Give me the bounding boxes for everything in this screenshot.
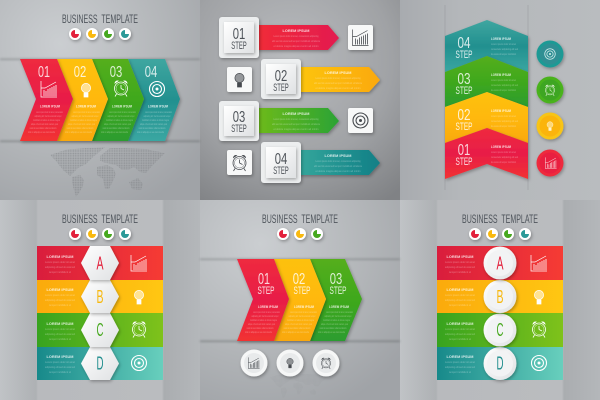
- chevron 03 green: [310, 259, 362, 341]
- circle C: C: [496, 320, 504, 340]
- icon circle: chart: [240, 350, 268, 376]
- arrow 03 green: LOREM IPSUM: [282, 112, 310, 116]
- panel: background 1: [0, 0, 200, 200]
- row B: LOREM IPSUM: [446, 288, 474, 292]
- icon box: target: [348, 108, 373, 133]
- chevron 04 teal: [445, 20, 528, 72]
- panel: four steps with arrows: [219, 17, 380, 183]
- step box 03: 03: [233, 109, 245, 126]
- arrow 02 yellow: LOREM IPSUM: [324, 71, 352, 75]
- hexagon D: [81, 347, 119, 380]
- chevron 01 red: 01: [38, 64, 50, 81]
- chevron 04 teal: 04: [458, 35, 471, 52]
- icon circle: bulb: [536, 112, 564, 140]
- circle D: [484, 347, 516, 380]
- icon box: bulb: [227, 67, 252, 92]
- row C: [437, 313, 563, 347]
- step box 02: 02: [275, 68, 287, 85]
- chevron 01 red: [20, 59, 73, 141]
- arrow 04 teal: [297, 150, 380, 175]
- chevron 03 green: 03: [110, 64, 122, 81]
- circle D: D: [496, 354, 504, 374]
- step box 04: [261, 142, 301, 183]
- chevron 02 yellow: [57, 59, 108, 141]
- chevron 04 teal: STEP: [456, 49, 472, 61]
- hexagon D: D: [96, 354, 104, 374]
- hexagon C: [81, 313, 119, 347]
- legend dots: [277, 228, 323, 240]
- step box 01: STEP: [231, 40, 247, 52]
- chevron 01 red: STEP: [456, 156, 472, 168]
- arrow 04 teal: LOREM IPSUM: [324, 154, 352, 158]
- row D: [437, 347, 563, 380]
- chevron 03 green: STEP: [456, 85, 472, 97]
- circle B: B: [496, 287, 504, 307]
- chevron 03 green: LOREM IPSUM: [491, 73, 511, 77]
- panel: background 2: [200, 0, 400, 200]
- hexagon C: C: [96, 320, 104, 340]
- chevron 01 red: [445, 128, 528, 179]
- icon box: chart: [348, 25, 373, 50]
- icon circle: target: [536, 40, 564, 68]
- panel: hexagon list A-D: [37, 214, 163, 380]
- chevron 02 yellow: LOREM IPSUM: [491, 109, 511, 113]
- chevron 01 red: LOREM IPSUM: [40, 104, 60, 108]
- icon: world map: [50, 147, 165, 197]
- chevron 03 green: STEP: [330, 285, 346, 297]
- chevron 01 red: 01: [258, 271, 270, 288]
- chevron 02 yellow: LOREM IPSUM: [76, 104, 96, 108]
- step box 02: [261, 59, 301, 99]
- panel: circle list A-D: [437, 214, 563, 380]
- arrow 02 yellow: [297, 67, 380, 92]
- panel: vertical stacked chevrons: [444, 5, 564, 190]
- row A: [37, 246, 163, 280]
- icon circle: chart: [536, 150, 564, 176]
- panel: background 5: [200, 200, 400, 400]
- legend dots: [69, 228, 131, 240]
- step box 03: STEP: [231, 123, 247, 135]
- chevron 01 red: [237, 259, 289, 341]
- circle A: A: [496, 254, 504, 274]
- chevron 01 red: STEP: [258, 285, 274, 297]
- icon circle: bulb: [276, 350, 304, 376]
- row B: [437, 280, 563, 313]
- hexagon B: [81, 280, 119, 313]
- chevron 02 yellow: 02: [458, 107, 471, 124]
- row D: LOREM IPSUM: [446, 355, 474, 359]
- circle B: [484, 280, 516, 313]
- row C: LOREM IPSUM: [446, 322, 474, 326]
- chevron 02 yellow: LOREM IPSUM: [294, 305, 314, 309]
- arrow 01 red: [255, 25, 339, 50]
- panel: background 4: [0, 200, 200, 400]
- step box 04: 04: [275, 151, 287, 168]
- panel: three-step chevrons: [200, 214, 400, 398]
- chevron 04 teal: LOREM IPSUM: [148, 104, 168, 108]
- step box 03: [219, 101, 259, 141]
- step box 02: STEP: [273, 82, 289, 94]
- heading: BUSINESS TEMPLATE: [62, 14, 138, 26]
- chevron 02 yellow: 02: [74, 64, 86, 81]
- chevron 03 green: LOREM IPSUM: [112, 104, 132, 108]
- row D: [37, 347, 163, 380]
- chevron 01 red: LOREM IPSUM: [258, 305, 278, 309]
- icon circle: clock: [312, 350, 340, 376]
- chevron 02 yellow: STEP: [456, 121, 472, 133]
- chevron 03 green: [92, 59, 144, 141]
- chevron 03 green: LOREM IPSUM: [329, 305, 349, 309]
- legend dots: [69, 28, 131, 40]
- step box 04: STEP: [273, 165, 289, 177]
- panel: four-step horizontal chevrons: [0, 14, 200, 197]
- chevron 03 green: [445, 56, 528, 107]
- circle A: [484, 246, 516, 280]
- row B: [37, 280, 163, 313]
- row B: LOREM IPSUM: [46, 288, 74, 292]
- row D: LOREM IPSUM: [46, 355, 74, 359]
- hexagon B: B: [96, 287, 104, 307]
- icon circle: clock: [536, 76, 564, 104]
- chevron 02 yellow: STEP: [294, 285, 310, 297]
- arrow 03 green: [255, 108, 339, 133]
- row A: LOREM IPSUM: [46, 255, 74, 259]
- chevron 03 green: 03: [458, 71, 471, 88]
- row C: LOREM IPSUM: [46, 322, 74, 326]
- heading: BUSINESS TEMPLATE: [462, 214, 538, 226]
- heading: BUSINESS TEMPLATE: [62, 214, 138, 226]
- step box 01: [219, 17, 259, 58]
- chevron 01 red: LOREM IPSUM: [491, 145, 511, 149]
- hexagon A: A: [96, 254, 104, 274]
- chevron 04 teal: LOREM IPSUM: [491, 37, 511, 41]
- chevron 02 yellow: 02: [293, 271, 305, 288]
- icon: faint world map: [270, 374, 328, 398]
- legend dots: [469, 228, 531, 240]
- chevron 04 teal: [128, 59, 180, 141]
- row A: [437, 246, 563, 280]
- step box 01: 01: [233, 26, 245, 43]
- heading: BUSINESS TEMPLATE: [262, 214, 338, 226]
- chevron 01 red: 01: [458, 142, 470, 159]
- panel: background 6: [400, 200, 600, 400]
- chevron 02 yellow: [274, 259, 326, 341]
- panel: background 3: [400, 0, 600, 200]
- hexagon A: [81, 246, 119, 280]
- chevron 03 green: 03: [330, 271, 342, 288]
- row C: [37, 313, 163, 347]
- chevron 02 yellow: [445, 92, 528, 143]
- row A: LOREM IPSUM: [446, 255, 474, 259]
- circle C: [484, 314, 516, 346]
- chevron 04 teal: 04: [145, 64, 157, 81]
- arrow 01 red: LOREM IPSUM: [282, 29, 310, 33]
- icon box: clock: [227, 150, 252, 175]
